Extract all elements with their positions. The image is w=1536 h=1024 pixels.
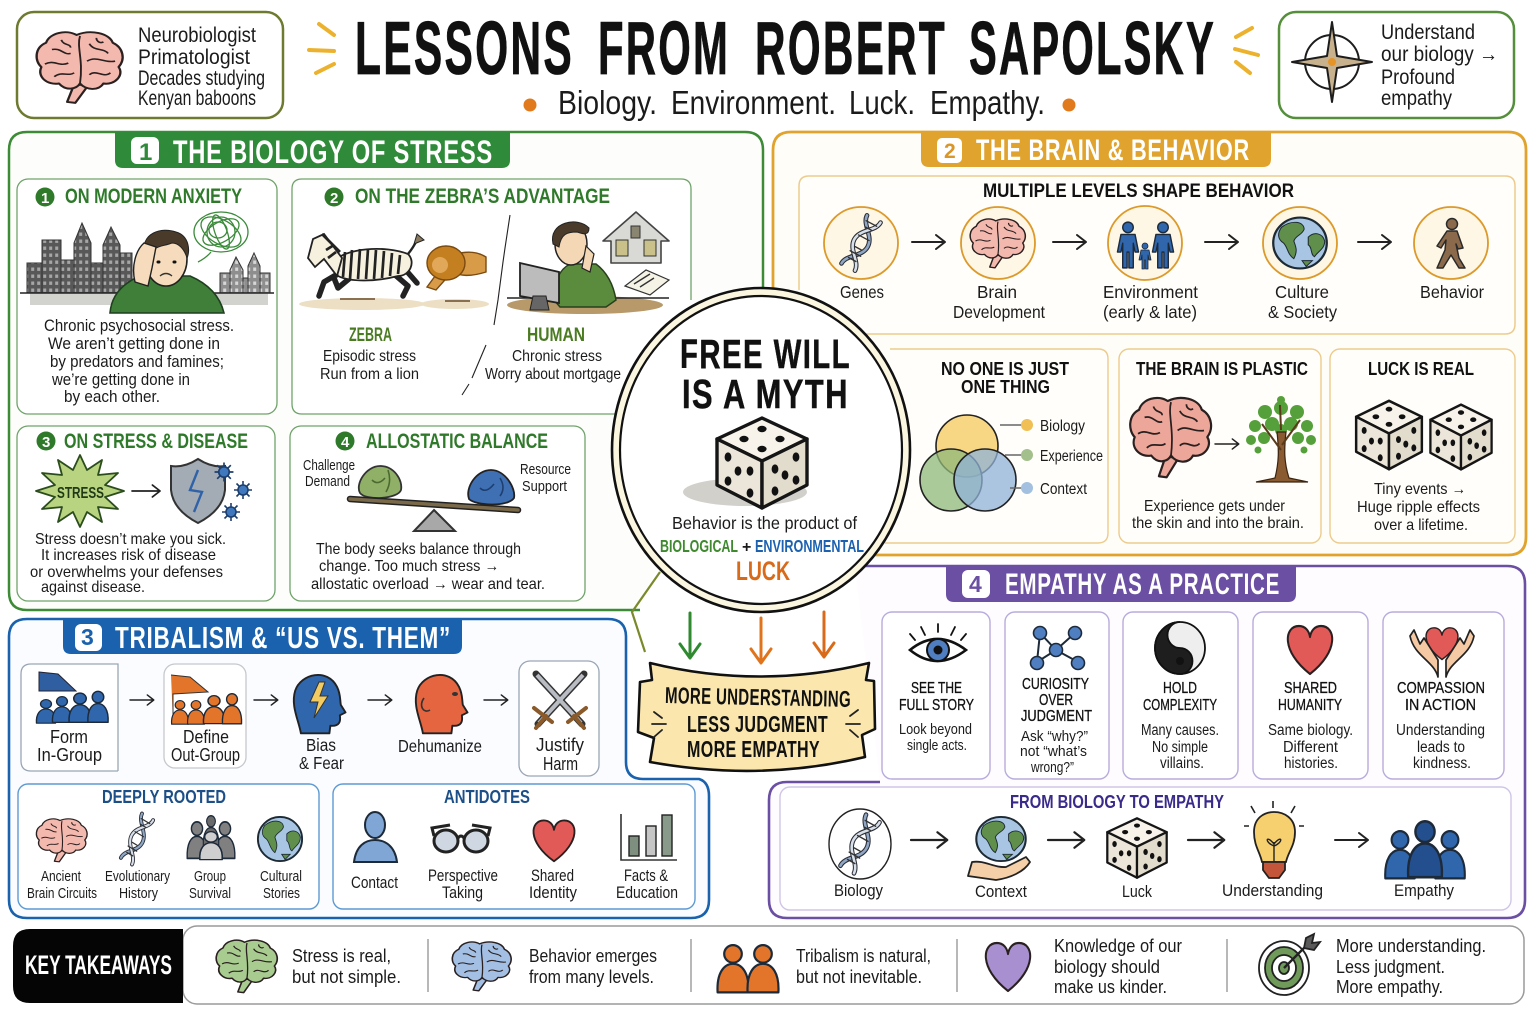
illustration: human at desk <box>507 212 669 314</box>
takeaway: stress: but not simple. <box>292 966 401 987</box>
balance labels: Resource <box>520 462 571 478</box>
seesaw illustration <box>350 466 518 531</box>
card: from biology to empathy <box>780 787 1511 910</box>
body text: or overwhelms your defenses <box>30 564 223 581</box>
body text: It increases risk of disease <box>41 547 216 564</box>
card: curiosity over judgment: Ask “why?” <box>1021 729 1088 745</box>
arrow <box>1205 235 1238 249</box>
icon: brain <box>36 819 87 862</box>
arrow <box>1358 235 1391 249</box>
icon: dice <box>1356 401 1492 469</box>
arrow <box>1188 832 1224 848</box>
card: compassion in action: kindness. <box>1413 755 1471 772</box>
arrow <box>368 695 392 705</box>
takeaway: tribalism: Tribalism is natural, <box>796 945 931 966</box>
goal text: empathy <box>1381 87 1452 110</box>
labels <box>351 867 678 902</box>
die shadow <box>683 478 807 506</box>
circle text <box>660 513 864 586</box>
icon: tree <box>1246 396 1316 482</box>
card: see the full story: FULL STORY <box>899 697 974 714</box>
goal text: our biology → <box>1381 43 1498 66</box>
heading tab 2 <box>921 133 1271 167</box>
card: on modern anxiety <box>17 179 277 414</box>
arrow: green down <box>680 613 700 658</box>
credentials box <box>17 12 283 118</box>
venn legend <box>1000 418 1103 498</box>
step: dehumanize: Dehumanize <box>398 736 482 756</box>
node: culture and society <box>1263 207 1337 322</box>
takeaway: stress <box>216 940 401 993</box>
body text: over a lifetime. <box>1374 517 1468 534</box>
banner text <box>665 682 851 762</box>
icon: stress burst: STRESS <box>57 485 104 502</box>
labels: Identity <box>529 884 578 902</box>
card: see the full story: Look beyond <box>899 721 972 738</box>
card: curiosity over judgment: not “what’s <box>1020 744 1087 760</box>
card: curiosity over judgment: wrong?” <box>1030 760 1074 776</box>
circle heading: FREE WILL <box>680 331 851 377</box>
banner text: MORE UNDERSTANDING <box>665 682 851 712</box>
heading tab 3: 3 <box>81 624 94 650</box>
labels: Stories <box>263 885 300 902</box>
icon: heart <box>533 820 575 861</box>
takeaway: target: Less judgment. <box>1336 956 1445 977</box>
human text <box>485 325 621 383</box>
card: hold complexity: COMPLEXITY <box>1143 697 1217 714</box>
takeaway: target: More understanding. <box>1336 935 1486 956</box>
icon: group <box>187 816 235 860</box>
zebra text <box>320 325 419 383</box>
key takeaways bar <box>13 926 1524 1004</box>
body text: allostatic overload → wear and tear. <box>311 576 545 593</box>
title accent rays left <box>309 24 334 73</box>
venn legend: Experience <box>1040 448 1103 465</box>
flow labels <box>834 881 1454 901</box>
card: see the full story: single acts. <box>907 737 967 754</box>
body text: against disease. <box>41 579 145 596</box>
node: brain development: Development <box>953 302 1045 322</box>
arrow <box>484 695 508 705</box>
zebra text: Run from a lion <box>320 366 419 383</box>
icon: compass <box>1292 22 1372 102</box>
node: culture and society: & Society <box>1268 302 1337 322</box>
body text: Experience gets under <box>1144 498 1286 515</box>
card: on stress and disease: ON STRESS & DISEASE <box>64 430 248 453</box>
takeaway: tribalism <box>717 945 931 992</box>
body text: Tiny events → <box>1374 481 1466 498</box>
card: on the zebra's advantage <box>292 179 691 414</box>
title accent rays right <box>1235 28 1258 73</box>
subtitle: Empathy. <box>930 84 1045 121</box>
takeaway: knowledge <box>986 935 1182 997</box>
subtitle <box>524 84 1076 121</box>
flow labels: Luck <box>1122 882 1152 901</box>
card: luck is real <box>1330 349 1515 543</box>
heading tab 3: TRIBALISM & “US VS. THEM” <box>115 620 451 655</box>
card: compassion in action: leads to <box>1417 739 1465 756</box>
human text: Worry about mortgage <box>485 366 621 383</box>
takeaway: behavior: Behavior emerges <box>529 945 657 966</box>
venn legend: Context <box>1040 481 1088 498</box>
labels: Brain Circuits <box>27 885 97 902</box>
icon: bar chart <box>621 814 677 860</box>
heading tab 3 <box>63 620 462 655</box>
labels: Contact <box>351 874 398 892</box>
card: the brain is plastic: THE BRAIN IS PLASTIC <box>1136 359 1308 379</box>
labels: Ancient <box>41 868 82 885</box>
card: see the full story <box>882 612 990 779</box>
labels: Education <box>616 884 678 902</box>
takeaway: behavior: from many levels. <box>529 966 654 987</box>
labels: History <box>119 885 158 902</box>
circle text: LUCK <box>736 556 790 586</box>
node: genes: Genes <box>840 282 884 302</box>
card: deeply rooted <box>18 784 319 909</box>
icon: contact person <box>354 812 397 862</box>
title: ROBERT <box>755 6 947 90</box>
card: antidotes: ANTIDOTES <box>444 787 530 807</box>
node: genes <box>824 207 898 302</box>
takeaway: knowledge: biology should <box>1054 956 1160 977</box>
step: bias and fear <box>294 675 346 773</box>
card: allostatic balance <box>290 426 585 601</box>
node: environment: (early & late) <box>1103 302 1197 322</box>
icon: globe on hand <box>968 817 1030 880</box>
card: on the zebra's advantage: ON THE ZEBRA’S ADVANTAGE <box>355 185 610 208</box>
arrow: orange down right <box>814 612 834 657</box>
card: on the zebra's advantage: 2 <box>330 190 338 207</box>
step: define out-group: Define <box>183 726 229 747</box>
card: shared humanity: Different <box>1283 739 1339 756</box>
title: FROM <box>598 6 730 90</box>
body text: by each other. <box>64 388 160 406</box>
arrow <box>130 695 154 705</box>
card: compassion in action: Understanding <box>1396 722 1485 739</box>
balance labels <box>303 458 571 495</box>
arrow <box>911 832 947 848</box>
body text: We aren’t getting done in <box>48 335 220 353</box>
icon: dna in circle <box>829 809 891 879</box>
icon: people embracing <box>1385 821 1465 878</box>
labels: Facts & <box>624 867 668 885</box>
node: behavior <box>1414 207 1488 302</box>
body text: the skin and into the brain. <box>1132 515 1304 532</box>
takeaway: knowledge: make us kinder. <box>1054 976 1167 997</box>
card: shared humanity: histories. <box>1284 755 1338 772</box>
circle text: ENVIRONMENTAL <box>755 536 864 556</box>
takeaway: tribalism: but not inevitable. <box>796 966 922 987</box>
card: curiosity over judgment: CURIOSITY <box>1022 676 1089 693</box>
card: hold complexity <box>1123 612 1238 779</box>
goal box <box>1279 12 1514 118</box>
step: bias and fear: & Fear <box>299 753 344 773</box>
icon: glasses <box>432 825 490 852</box>
banner text: LESS JUDGMENT <box>687 711 828 737</box>
labels: Cultural <box>260 868 302 885</box>
card: curiosity over judgment: OVER <box>1039 692 1073 709</box>
step: dehumanize <box>398 675 482 756</box>
node: brain development: Brain <box>977 282 1017 302</box>
body text: The body seeks balance through <box>316 541 521 558</box>
icon: cracked shield with viruses <box>171 459 252 523</box>
divider crack <box>462 215 510 395</box>
card: curiosity over judgment <box>1005 612 1109 779</box>
card: see the full story: SEE THE <box>911 680 962 697</box>
body text <box>1357 481 1480 534</box>
icon: brain <box>1130 398 1211 477</box>
takeaway: target <box>1259 934 1486 997</box>
node: environment <box>1103 206 1198 322</box>
heading tab 1: 1 <box>139 139 152 166</box>
icon: globe <box>258 817 302 861</box>
takeaway: stress: Stress is real, <box>292 945 391 966</box>
circle text: + <box>742 539 751 556</box>
central circle: free will is a myth <box>612 288 910 612</box>
icon: dna <box>121 814 153 864</box>
goal text: Profound <box>1381 66 1455 89</box>
card: antidotes <box>333 784 695 909</box>
card: from biology to empathy: FROM BIOLOGY TO EMPATHY <box>1010 792 1224 812</box>
heading tab 1 <box>115 132 510 170</box>
human text: Chronic stress <box>512 348 602 365</box>
balance labels: Support <box>522 479 567 495</box>
heading tab 4 <box>946 567 1296 602</box>
multiple levels box: MULTIPLE LEVELS SHAPE BEHAVIOR <box>983 181 1294 202</box>
takeaways label: KEY TAKEAWAYS <box>25 950 172 980</box>
card: on modern anxiety: ON MODERN ANXIETY <box>65 185 242 208</box>
zebra text: Episodic stress <box>323 348 416 365</box>
heading tab 4: 4 <box>969 571 982 597</box>
panel: tribalism <box>9 619 709 918</box>
card: on stress and disease: 3 <box>42 434 50 451</box>
arrow <box>1053 235 1086 249</box>
goal text: Understand <box>1381 21 1475 44</box>
circle text: Behavior is the product of <box>672 513 857 533</box>
card: hold complexity: villains. <box>1160 755 1204 772</box>
step: define out-group <box>164 664 246 768</box>
card: compassion in action: COMPASSION <box>1397 680 1485 697</box>
step: form in-group: In-Group <box>37 744 102 765</box>
goal text <box>1381 21 1498 110</box>
card: on stress and disease <box>17 426 275 601</box>
heading tab 2: THE BRAIN & BEHAVIOR <box>976 134 1250 167</box>
arrow <box>1335 833 1368 847</box>
subtitle: Luck. <box>849 84 915 121</box>
arrow <box>132 485 160 497</box>
card: on modern anxiety: 1 <box>41 190 49 207</box>
takeaway: behavior <box>452 942 657 991</box>
card: compassion in action: IN ACTION <box>1405 697 1476 714</box>
card: hold complexity: HOLD <box>1163 680 1197 697</box>
circle heading: IS A MYTH <box>682 371 849 417</box>
subtitle: Biology. <box>558 84 657 121</box>
body text <box>1132 498 1304 532</box>
labels <box>27 868 302 902</box>
arrow <box>254 695 278 705</box>
icon: stress burst <box>36 455 124 527</box>
arrow <box>1048 832 1084 848</box>
body text: change. Too much stress → <box>319 558 499 575</box>
card: no one is just one thing <box>885 349 1108 543</box>
credentials text: Kenyan baboons <box>138 87 256 110</box>
human text: HUMAN <box>527 325 585 346</box>
body text: Huge ripple effects <box>1357 499 1480 516</box>
card: compassion in action <box>1383 612 1504 779</box>
credentials text: Decades studying <box>138 67 265 90</box>
credentials text: Neurobiologist <box>138 24 256 47</box>
takeaway: target: More empathy. <box>1336 976 1443 997</box>
card: shared humanity: SHARED <box>1284 680 1337 697</box>
body text <box>311 541 545 593</box>
icon: die <box>717 418 807 508</box>
banner: more understanding <box>638 663 875 771</box>
credentials text <box>138 24 265 110</box>
icon: light bulb <box>1244 801 1304 878</box>
circle text: BIOLOGICAL <box>660 536 738 556</box>
card: curiosity over judgment: JUDGMENT <box>1021 708 1092 725</box>
step: define out-group: Out-Group <box>171 744 240 765</box>
body text <box>44 317 234 406</box>
flow labels: Understanding <box>1222 881 1323 900</box>
labels: Group <box>194 868 226 885</box>
card: hold complexity: No simple <box>1152 739 1208 756</box>
flow labels: Context <box>975 882 1027 901</box>
body text: Chronic psychosocial stress. <box>44 317 234 335</box>
heading tab 2: 2 <box>944 140 956 163</box>
card: the brain is plastic <box>1119 349 1321 543</box>
card: shared humanity <box>1253 612 1368 779</box>
takeaways label <box>13 929 183 1003</box>
icon: die <box>1107 818 1167 878</box>
flow labels: Empathy <box>1394 881 1454 900</box>
card: luck is real: LUCK IS REAL <box>1368 359 1474 379</box>
labels: Taking <box>442 884 483 902</box>
labels: Survival <box>189 885 231 902</box>
step: justify harm: Harm <box>543 753 578 774</box>
body text: Stress doesn’t make you sick. <box>35 531 226 548</box>
card: allostatic balance: ALLOSTATIC BALANCE <box>366 430 548 453</box>
arrow <box>912 235 945 249</box>
balance labels: Challenge <box>303 458 355 474</box>
arrow <box>1215 439 1239 449</box>
body text: by predators and famines; <box>50 353 224 371</box>
illustration: zebra running from lion <box>299 234 489 310</box>
panel: the brain and behavior <box>773 132 1526 555</box>
title <box>355 6 1216 90</box>
body text <box>30 531 226 596</box>
title: LESSONS <box>355 6 574 90</box>
step: form in-group: Form <box>50 726 88 747</box>
card: no one is just one thing: NO ONE IS JUST <box>941 359 1069 379</box>
step: form in-group <box>21 664 118 771</box>
card: shared humanity: HUMANITY <box>1278 697 1342 714</box>
card: deeply rooted: DEEPLY ROOTED <box>102 787 226 807</box>
credentials text: Primatologist <box>138 46 250 69</box>
labels: Evolutionary <box>105 868 170 885</box>
step: justify harm <box>519 661 599 776</box>
panel: empathy as a practice <box>769 566 1525 918</box>
heading tab 4: EMPATHY AS A PRACTICE <box>1005 568 1280 601</box>
venn legend: Biology <box>1040 418 1085 435</box>
balance labels: Demand <box>305 474 350 490</box>
card: hold complexity: Many causes. <box>1141 722 1219 739</box>
multiple levels box <box>799 176 1515 334</box>
subtitle: Environment. <box>671 84 836 121</box>
card: shared humanity: Same biology. <box>1268 722 1353 739</box>
card: allostatic balance: 4 <box>341 434 350 451</box>
labels: Shared <box>531 867 574 885</box>
banner text: MORE EMPATHY <box>687 736 820 762</box>
node: environment: Environment <box>1103 282 1198 302</box>
zebra text: ZEBRA <box>349 325 392 346</box>
heading tab 1: THE BIOLOGY OF STRESS <box>173 134 493 170</box>
circle heading <box>680 331 851 417</box>
step: bias and fear: Bias <box>306 735 336 755</box>
node: culture and society: Culture <box>1275 282 1329 302</box>
takeaway: knowledge: Knowledge of our <box>1054 935 1182 956</box>
title: SAPOLSKY <box>969 6 1216 90</box>
step: justify harm: Justify <box>536 734 585 755</box>
arrow: orange down center <box>751 618 771 663</box>
venn diagram <box>920 415 1016 511</box>
node: brain development <box>953 207 1045 322</box>
illustration: stressed man in city <box>20 211 274 313</box>
card: no one is just one thing: ONE THING <box>961 377 1050 397</box>
body text: we’re getting done in <box>51 371 190 389</box>
panel: the biology of stress <box>9 132 763 610</box>
node: behavior: Behavior <box>1420 282 1484 302</box>
flow labels: Biology <box>834 881 883 900</box>
connector line to banner <box>632 572 660 652</box>
labels: Perspective <box>428 867 498 885</box>
icon: brain <box>37 32 123 103</box>
